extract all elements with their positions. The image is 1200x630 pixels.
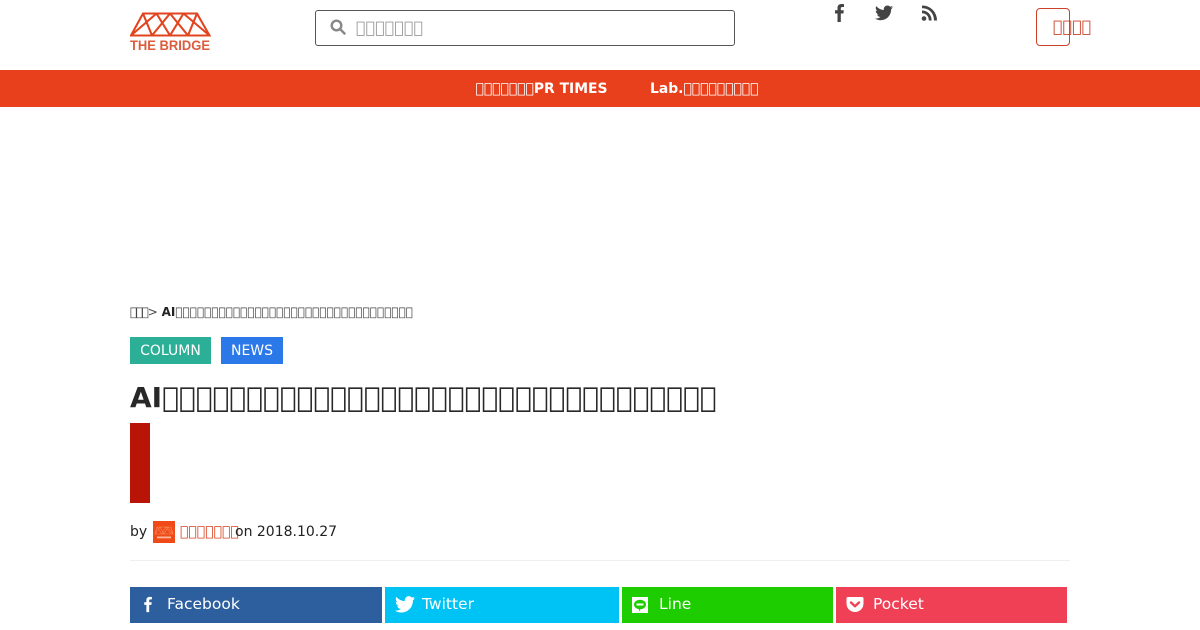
share button: Pocket [836,587,1067,623]
author name:  [180,524,239,540]
navigation bar [0,70,1200,107]
label: Pocket [873,595,924,613]
publish date: on 2018.10.27 [235,524,337,540]
label: Line [659,595,691,613]
login button [1036,8,1070,46]
search box [315,10,735,46]
tag: NEWS: NEWS [231,343,273,359]
nav link: Lab: Lab. [650,81,758,97]
breadcrumb: > AI [130,305,413,319]
icon: facebook [835,4,844,22]
icon: search [330,20,346,35]
share button: Twitter [385,587,619,623]
search placeholder:  [356,18,423,37]
label: Twitter [422,595,474,613]
logo: The Bridge [130,12,211,52]
tag: NEWS [221,337,283,364]
byline [130,521,337,543]
icon: line [632,597,648,613]
icon: facebook [144,596,152,612]
nav link: PR TIMES: PR TIMES [476,81,608,97]
by label: by [130,524,147,540]
icon: twitter [875,6,893,20]
red block [130,423,150,503]
divider [130,560,1070,561]
share button: Line [622,587,833,623]
tag: COLUMN: COLUMN [140,343,201,359]
author avatar [153,521,175,543]
icon: twitter [395,596,415,612]
login button label:  [1053,17,1091,36]
share button: Facebook [130,587,382,623]
article title: AI [130,381,717,414]
icon: rss [922,6,937,21]
label: Facebook [167,595,240,613]
icon: pocket [846,597,864,612]
tag: COLUMN [130,337,211,364]
